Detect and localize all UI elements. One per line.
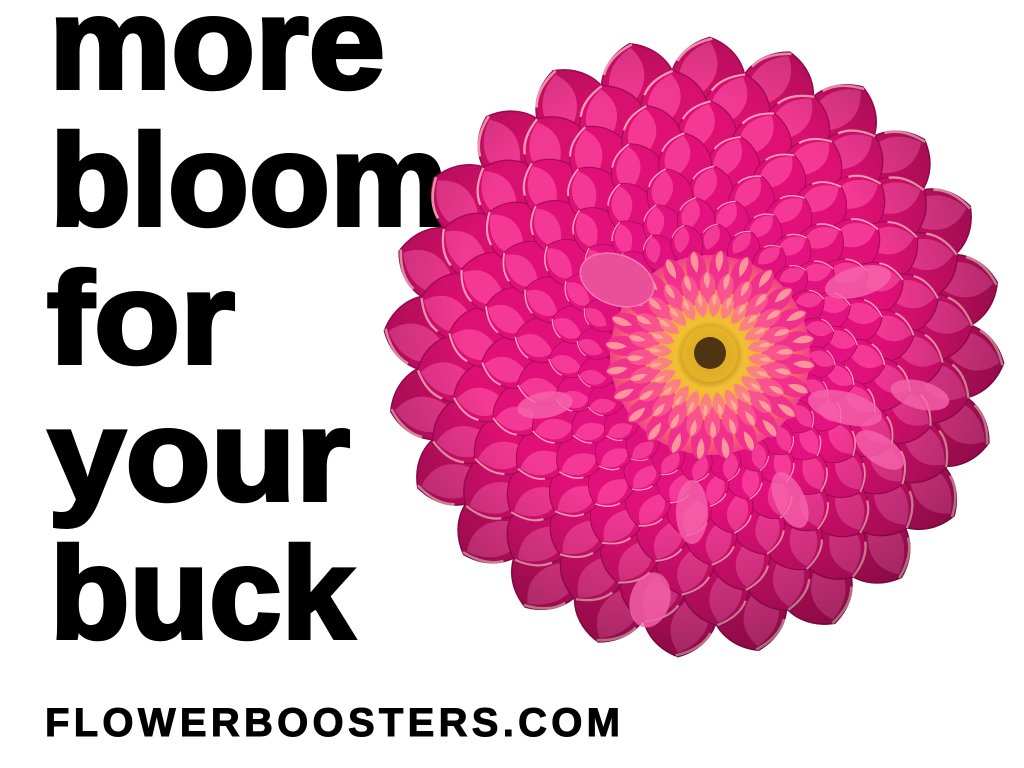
petals — [368, 21, 1020, 673]
large pale petal — [573, 244, 661, 316]
heading: more bloom for your buck: your — [48, 382, 350, 528]
illustration: pink dahlia flower — [368, 21, 1020, 673]
heading: more bloom for your buck: for — [47, 245, 235, 391]
shaded petals at lower right — [368, 21, 1020, 673]
heading: more bloom for your buck: bloom — [50, 107, 448, 253]
website address: FLOWERBOOSTERS.COM — [45, 701, 620, 745]
heading: more bloom for your buck: buck — [50, 520, 355, 666]
flower centre — [594, 239, 826, 471]
heading: more bloom for your buck — [47, 0, 448, 666]
pale sunlit petals — [515, 259, 953, 632]
